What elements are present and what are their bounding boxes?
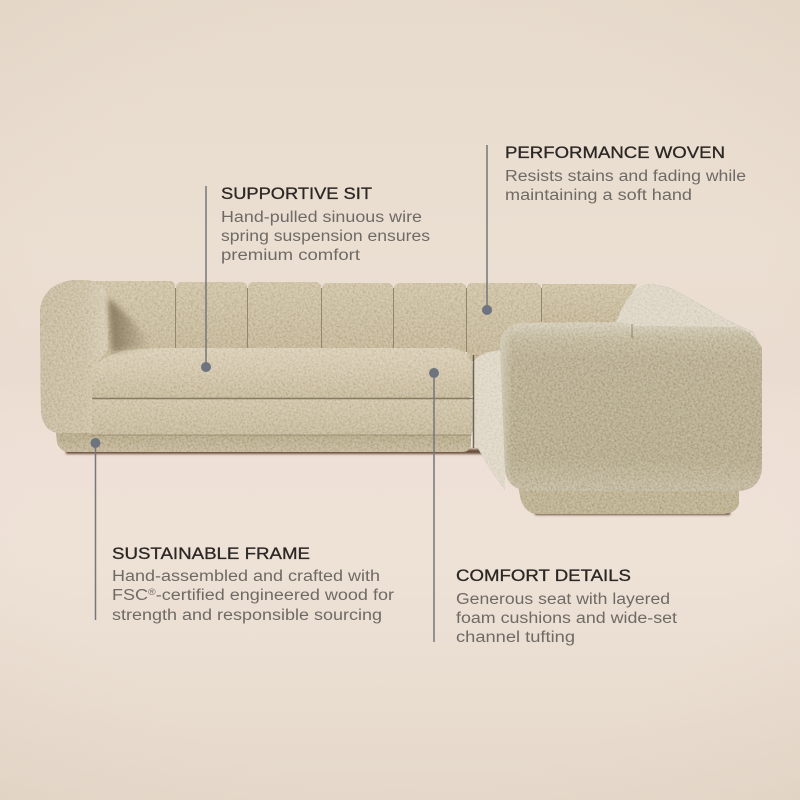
shadow under left arm on back	[108, 298, 152, 352]
body text: spring suspension ensures	[221, 228, 430, 245]
right arm front panel	[500, 322, 762, 491]
inner right seat	[473, 350, 505, 490]
right back arm	[616, 285, 762, 400]
heading: PERFORMANCE WOVEN	[505, 143, 725, 162]
right base	[518, 485, 739, 514]
body text	[221, 209, 430, 264]
heading: SUPPORTIVE SIT	[221, 184, 372, 203]
lower seat platform	[90, 399, 473, 435]
body text	[112, 568, 394, 624]
left arm	[40, 280, 108, 433]
body text: FSC	[112, 587, 143, 604]
left base	[56, 430, 471, 452]
body text: Generous seat with layered	[456, 591, 670, 608]
body text: channel tufting	[456, 629, 575, 646]
sofa photo illustration	[40, 280, 762, 515]
far back cushions	[90, 281, 637, 375]
leader line and dot	[90, 438, 100, 620]
leader line and dot	[429, 368, 439, 642]
body text: ®	[148, 587, 156, 597]
body text: strength and responsible sourcing	[112, 607, 382, 624]
body text: foam cushions and wide-set	[456, 610, 678, 627]
soft light on left edge of right arm	[500, 326, 512, 488]
heading: COMFORT DETAILS	[456, 566, 631, 585]
body text: Resists stains and fading while	[505, 168, 746, 185]
callout: performance woven	[482, 143, 746, 315]
heading: SUSTAINABLE FRAME	[112, 544, 310, 563]
seat cushion	[92, 348, 473, 398]
callout: comfort details	[429, 368, 678, 646]
body text	[456, 591, 678, 646]
body text: premium comfort	[221, 247, 361, 264]
cushion seams	[92, 288, 632, 448]
body text: Hand-pulled sinuous wire	[221, 209, 422, 226]
body text: maintaining a soft hand	[505, 187, 692, 204]
leader line and dot	[201, 186, 211, 372]
body text: -certified engineered wood for	[156, 587, 394, 604]
callout: supportive sit	[201, 184, 430, 372]
body text: Hand-assembled and crafted with	[112, 568, 380, 585]
leader line and dot	[482, 145, 492, 315]
body text	[505, 168, 746, 204]
floor shadow	[66, 449, 730, 515]
callout: sustainable frame	[90, 438, 394, 624]
